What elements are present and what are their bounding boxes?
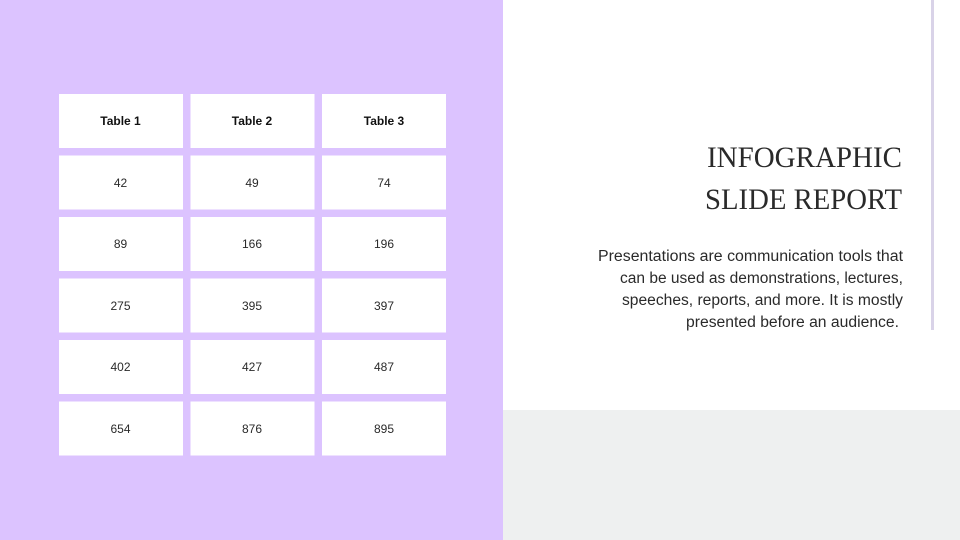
row 3 <box>59 278 446 332</box>
row 4 <box>59 340 446 394</box>
accent vertical bar <box>931 0 934 330</box>
table <box>59 94 446 456</box>
row 3: 275 <box>110 299 131 313</box>
panel: purple left <box>0 0 503 540</box>
row 4: 402 <box>110 360 131 374</box>
row 5: 654 <box>110 422 131 436</box>
description text: speeches, reports, and more. It is mostly <box>622 292 903 309</box>
header row: Table 2 <box>232 114 273 128</box>
title <box>705 141 902 216</box>
row 3: 395 <box>242 299 262 313</box>
row 1 <box>59 156 446 210</box>
row 2: 196 <box>374 237 394 251</box>
description text <box>598 248 904 331</box>
title: SLIDE REPORT <box>705 183 902 216</box>
row 2: 166 <box>242 237 262 251</box>
row 4: 427 <box>242 360 262 374</box>
row 5: 876 <box>242 422 262 436</box>
row 2 <box>59 217 446 271</box>
row 5 <box>59 402 446 456</box>
row 1: 49 <box>245 176 259 190</box>
description text: Presentations are communication tools that <box>598 248 904 265</box>
panel: grey bottom right <box>503 410 960 540</box>
header row <box>59 94 446 148</box>
header row: Table 1 <box>100 114 141 128</box>
row 1: 74 <box>377 176 391 190</box>
row 4: 487 <box>374 360 394 374</box>
row 1: 42 <box>114 176 127 190</box>
header row: Table 3 <box>364 114 405 128</box>
description text: can be used as demonstrations, lectures, <box>620 270 903 287</box>
row 2: 89 <box>114 237 127 251</box>
row 5: 895 <box>374 422 394 436</box>
title: INFOGRAPHIC <box>707 141 902 174</box>
row 3: 397 <box>374 299 394 313</box>
description text: presented before an audience. <box>686 314 899 331</box>
